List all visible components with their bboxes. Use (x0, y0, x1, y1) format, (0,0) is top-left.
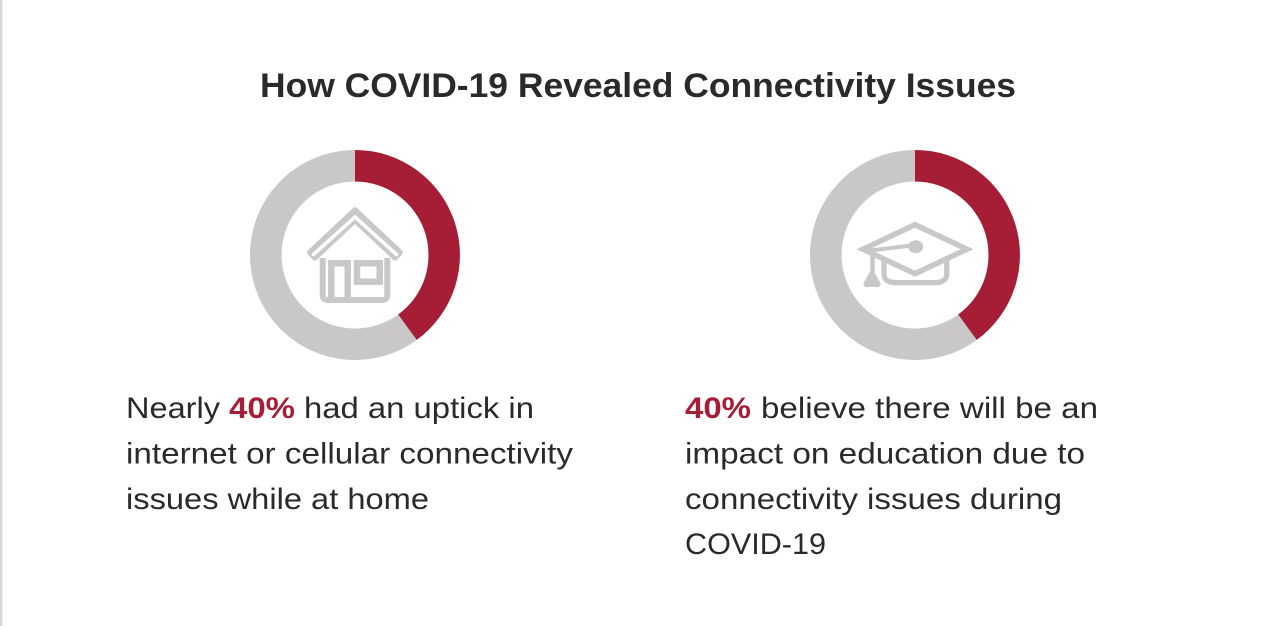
text: education statistic: COVID-19 (685, 528, 826, 561)
text: education statistic: believe there will be an (761, 392, 1098, 425)
text: education statistic: impact on education due to (685, 438, 1085, 470)
donut chart: 40 percent (266, 150, 460, 344)
title: How COVID-19 Revealed Connectivity Issues (260, 67, 1016, 105)
text: home statistic: 40% (229, 392, 295, 425)
panel: education impact (685, 150, 1098, 561)
text: home statistic (126, 392, 573, 516)
icon: house (310, 210, 400, 300)
text: home statistic: Nearly (126, 392, 220, 425)
donut chart: 40 percent (826, 150, 1020, 344)
icon: graduation cap (863, 225, 967, 287)
text: education statistic (685, 392, 1098, 561)
text: home statistic: had an uptick in (304, 392, 534, 425)
text: home statistic: internet or cellular connectivity (126, 438, 573, 470)
panel: home connectivity (126, 150, 573, 516)
text: home statistic: issues while at home (126, 483, 429, 516)
text: education statistic: 40% (685, 392, 751, 425)
text: education statistic: connectivity issues during (685, 483, 1062, 516)
